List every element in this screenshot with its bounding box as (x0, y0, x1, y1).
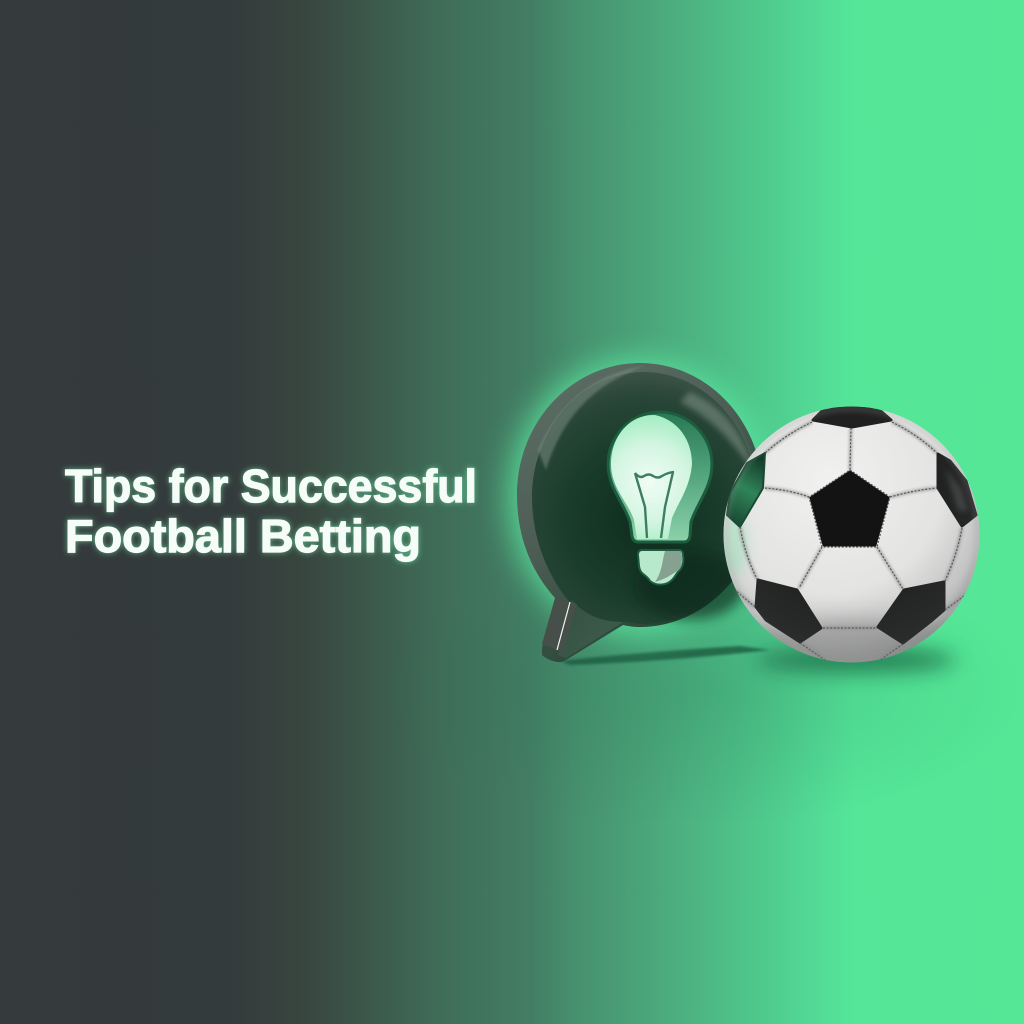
light bulb (608, 412, 712, 585)
black pentagons (756, 407, 976, 643)
left reflection panel (727, 453, 765, 527)
stitched seams (735, 422, 972, 660)
bubble glow (508, 359, 768, 635)
floor shading (370, 560, 1024, 820)
rim shading (726, 408, 978, 660)
bubble tail body (558, 600, 623, 658)
bubble body rim (517, 363, 763, 662)
bulb filament (635, 472, 673, 538)
title: Football Betting (65, 510, 421, 562)
soft seam shading (736, 420, 966, 630)
title: Football Betting (65, 510, 421, 562)
pentagon sheen (947, 474, 968, 512)
bulb cavity (608, 412, 712, 542)
ball bottom shading (760, 610, 943, 662)
tail end cap (542, 598, 577, 652)
soccer ball (723, 406, 980, 671)
bulb glass (611, 415, 692, 539)
speech bubble with light bulb icon (508, 359, 768, 662)
title: Tips for Successful (65, 460, 477, 512)
lower right shade (635, 550, 745, 620)
title (65, 460, 477, 562)
left green tint (723, 515, 747, 575)
bubble top highlight (538, 366, 645, 470)
ground shadows (560, 646, 956, 673)
bulb base (638, 550, 683, 585)
bubble face (532, 372, 757, 648)
title: Tips for Successful (65, 460, 477, 512)
